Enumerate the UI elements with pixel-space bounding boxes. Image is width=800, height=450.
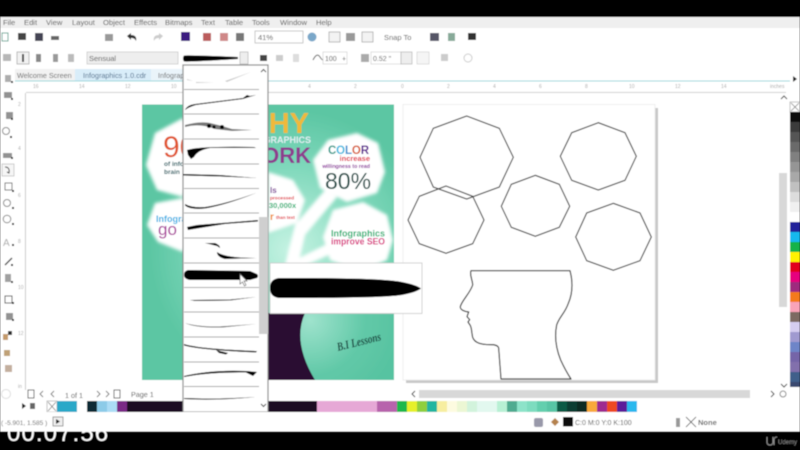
horizontal ruler: 14 bbox=[721, 84, 727, 90]
horizontal ruler: 0 bbox=[401, 84, 404, 90]
stat bubble: infographics go bbox=[156, 214, 210, 239]
horizontal ruler: 10 bbox=[171, 84, 177, 90]
menu bar: Object bbox=[103, 18, 126, 27]
vertical ruler: in bbox=[18, 384, 22, 390]
menu bar: File bbox=[3, 18, 15, 27]
brush preview flyout bbox=[270, 263, 422, 314]
page navigator: Page 1 bbox=[131, 390, 154, 399]
property bar: 0.52 " bbox=[373, 56, 392, 63]
page navigator: 1 of 1 bbox=[65, 391, 83, 400]
toolbox: A bbox=[3, 238, 10, 249]
document tabs bbox=[15, 69, 797, 82]
octagon 5 bbox=[576, 203, 651, 270]
horizontal ruler bbox=[15, 82, 790, 93]
horizontal ruler: inches bbox=[770, 84, 785, 90]
menu bar: Text bbox=[201, 18, 216, 27]
standard toolbar: 41% bbox=[258, 33, 273, 42]
stat bubble: processed faster: r bbox=[270, 212, 274, 223]
standard toolbar: Snap To bbox=[384, 33, 411, 42]
bottom black band bbox=[0, 432, 800, 450]
property bar: Sensual bbox=[89, 54, 116, 63]
vertical ruler: 8 bbox=[18, 239, 21, 245]
status bar: ( -5.901, 1.585 ) bbox=[1, 420, 47, 427]
horizontal ruler: 10 bbox=[629, 84, 635, 90]
top black letterbox band bbox=[0, 0, 800, 17]
status bar: None bbox=[698, 418, 717, 427]
brush preset strokes bbox=[183, 72, 258, 400]
white artboard page bbox=[403, 104, 658, 383]
document tabs: Infographics 1.0.cdr bbox=[83, 71, 147, 80]
status bar bbox=[0, 412, 800, 432]
document tabs: Welcome Screen bbox=[17, 71, 72, 80]
stat bubble: color 80 percent: increase bbox=[340, 154, 370, 163]
stat bubble: color 80 percent: willingness to read bbox=[321, 164, 370, 170]
vertical ruler: 10 bbox=[18, 285, 24, 291]
poster background bbox=[142, 104, 394, 380]
octagon 4 bbox=[501, 175, 570, 236]
menu bar: Table bbox=[225, 18, 243, 27]
vertical ruler: 4 bbox=[18, 146, 21, 152]
canvas scrollbars bbox=[412, 96, 787, 398]
document tabs: Infographics bbox=[158, 71, 198, 80]
poster light rays and bubbles bbox=[146, 118, 393, 272]
stat bubble: improve SEO: Infographics bbox=[331, 228, 385, 238]
signature: B.I Lessons: B.I Lessons bbox=[335, 329, 383, 354]
menu bar: Tools bbox=[252, 18, 270, 27]
stat bubble: color 80 percent: 80% bbox=[325, 168, 371, 194]
mouse cursor bbox=[240, 274, 247, 286]
vertical ruler: 2 bbox=[18, 102, 21, 108]
menu bar bbox=[0, 17, 800, 28]
stat bubble: improve SEO: improve SEO bbox=[331, 236, 385, 246]
poster heading bbox=[241, 108, 311, 168]
toolbox bbox=[2, 75, 14, 398]
menu bar: View bbox=[46, 18, 63, 27]
octagon 2 bbox=[560, 123, 636, 190]
stat bubble: processed faster: than text bbox=[276, 215, 295, 220]
poster heading: INFOGRAPHICS bbox=[242, 135, 311, 145]
head silhouette bbox=[460, 271, 572, 379]
horizontal ruler: 14 bbox=[79, 84, 85, 90]
stat bubble: processed faster: 30,000x bbox=[269, 201, 297, 210]
octagon 3 bbox=[408, 186, 484, 253]
horizontal ruler: 4 bbox=[493, 84, 496, 90]
poster heading: WHY bbox=[241, 108, 309, 140]
menu bar: Effects bbox=[134, 18, 157, 27]
stat bubble: color 80 percent: COLOR bbox=[328, 145, 370, 157]
property bar: + bbox=[342, 56, 346, 63]
horizontal ruler: 2 bbox=[447, 84, 450, 90]
bottom colour palette bbox=[22, 401, 637, 412]
property bar: 100 bbox=[325, 56, 337, 63]
vertical ruler: 6 bbox=[18, 193, 21, 199]
menu bar: Layout bbox=[72, 18, 96, 27]
stat bubble: infographics go: Infographics bbox=[156, 214, 210, 224]
poster page: infographic in progress bbox=[142, 104, 394, 380]
right colour palette bbox=[790, 102, 800, 387]
status bar: C:0 M:0 Y:0 K:100 bbox=[575, 420, 632, 427]
stat bubble: color 80 percent bbox=[321, 145, 371, 194]
octagon 1 bbox=[420, 116, 513, 199]
dropdown scrollbar bbox=[259, 70, 268, 406]
menu bar: Help bbox=[316, 18, 332, 27]
horizontal ruler: 4 bbox=[308, 84, 311, 90]
video timer, top cropped by status bar: 00:07:56 bbox=[7, 420, 109, 447]
horizontal ruler: 8 bbox=[585, 84, 588, 90]
standard toolbar bbox=[2, 31, 476, 43]
purple corner and green circle bbox=[268, 313, 394, 380]
stat bubble: processed faster: ls bbox=[270, 186, 277, 195]
menu bar: Edit bbox=[24, 18, 38, 27]
stat bubble: 90 percent: brain bbox=[164, 169, 180, 176]
horizontal ruler: 16 bbox=[33, 84, 39, 90]
stat bubble: infographics go: go bbox=[158, 220, 177, 239]
stat bubble: improve SEO bbox=[331, 228, 385, 246]
page navigator bbox=[28, 390, 154, 400]
Udemy watermark: Udemy bbox=[778, 440, 797, 446]
menu bar: Bitmaps bbox=[165, 18, 193, 27]
stat bubble: 90 percent: of information bbox=[164, 161, 208, 168]
stat bubble: 90 percent: 90% bbox=[163, 131, 223, 164]
artistic media dropdown list bbox=[183, 65, 268, 412]
horizontal ruler: 12 bbox=[125, 84, 131, 90]
vertical ruler: 12 bbox=[18, 331, 24, 337]
Udemy watermark bbox=[767, 437, 797, 446]
stat bubble: processed faster bbox=[269, 186, 297, 223]
horizontal ruler: 6 bbox=[539, 84, 542, 90]
vertical ruler bbox=[18, 93, 26, 390]
stat bubble: processed faster: processed bbox=[270, 196, 294, 202]
horizontal ruler: 2 bbox=[354, 84, 357, 90]
poster heading: WORK bbox=[241, 143, 311, 168]
menu bar: Window bbox=[280, 18, 308, 27]
horizontal ruler: 12 bbox=[675, 84, 681, 90]
property bar bbox=[3, 52, 472, 64]
